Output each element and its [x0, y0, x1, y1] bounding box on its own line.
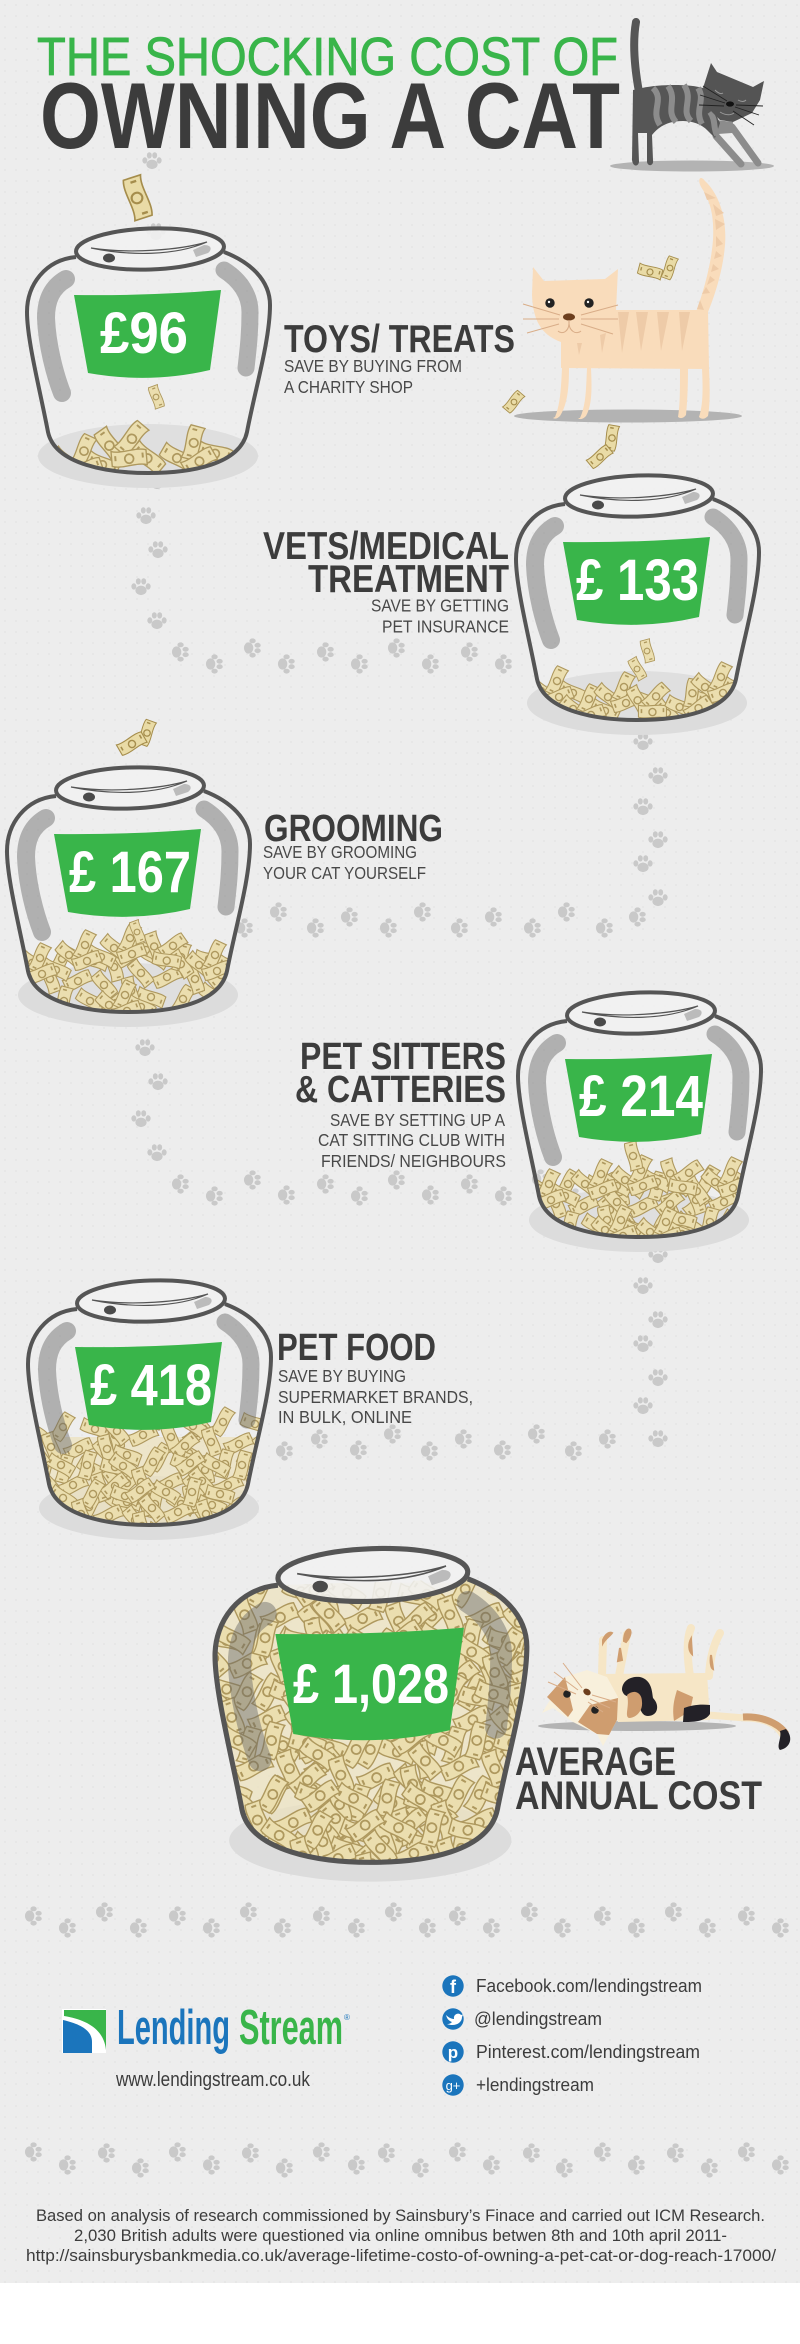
panel: pet food — [10, 1278, 473, 1551]
panel: pet food: £ 418 — [90, 1353, 212, 1418]
heading and tip: PET FOOD — [277, 1327, 436, 1369]
heading and tip: SAVE BY GETTING — [371, 596, 509, 616]
panel: average annual cost — [212, 1546, 790, 1882]
title — [37, 27, 620, 168]
source note: http://sainsburysbankmedia.co.uk/average-lifetime-costo-of-owning-a-pet-cat-or-dog-reach-17000/ — [26, 2246, 776, 2265]
social: pinterest: p — [448, 2043, 458, 2062]
paw trail: from sitters jar to food jar — [276, 1246, 668, 1461]
paw row below footer — [25, 2142, 789, 2178]
heading and tip: PET INSURANCE — [382, 616, 509, 636]
heading and tip: SAVE BY SETTING UP A — [330, 1110, 505, 1130]
heading and tip — [284, 318, 515, 397]
heading and tip — [263, 525, 509, 636]
logo: Lending Stream — [62, 2001, 350, 2055]
source note — [26, 2206, 776, 2265]
source note: Based on analysis of research commissioned by Sainsbury’s Finace and carried out ICM Research. — [36, 2206, 765, 2225]
social: google plus: g+ — [446, 2078, 460, 2093]
social: facebook: f — [450, 1977, 457, 1997]
website: www.lendingstream.co.uk — [115, 2069, 311, 2091]
heading and tip: SUPERMARKET BRANDS, — [278, 1387, 473, 1407]
illustration: calico cat — [538, 1628, 790, 1750]
heading and tip: TREATMENT — [308, 558, 509, 601]
jar with £133 — [516, 473, 759, 735]
heading and tip: TOYS/ TREATS — [284, 318, 515, 361]
heading and tip: YOUR CAT YOURSELF — [263, 863, 426, 883]
panel: pet sitters and catteries — [295, 990, 777, 1252]
jar with £214 — [515, 990, 777, 1252]
panel: pet sitters and catteries: £ 214 — [579, 1064, 703, 1129]
illustration: grey cat — [610, 22, 774, 172]
panel: average annual cost: £ 1,028 — [293, 1652, 449, 1715]
paw trail: upper left — [131, 152, 512, 674]
logo: Lending Stream: ® — [344, 2013, 350, 2022]
heading and tip: & CATTERIES — [295, 1069, 506, 1111]
paw trail: from grooming jar to sitters jar — [131, 1007, 584, 1208]
heading: AVERAGE — [515, 1740, 676, 1784]
panel: toys and treats — [27, 226, 515, 488]
heading and tip — [263, 808, 443, 883]
heading and tip: IN BULK, ONLINE — [278, 1407, 412, 1427]
heading and tip: A CHARITY SHOP — [284, 377, 413, 397]
social: facebook: Facebook.com/lendingstream — [476, 1976, 702, 1996]
heading — [515, 1740, 762, 1818]
logo: Lending Stream: Lending — [117, 2001, 230, 2055]
social: pinterest: Pinterest.com/lendingstream — [476, 2042, 700, 2062]
heading and tip: PET SITTERS — [300, 1036, 506, 1078]
panel: vets and medical treatment — [263, 473, 759, 735]
source note: 2,030 British adults were questioned via online omnibus betwen 8th and 10th april 2011- — [74, 2226, 727, 2245]
logo: Lending Stream: Stream — [239, 2001, 343, 2055]
panel: grooming — [7, 765, 443, 1027]
falling banknotes — [116, 175, 678, 756]
heading and tip: FRIENDS/ NEIGHBOURS — [321, 1151, 506, 1171]
illustration: orange cat — [514, 178, 742, 422]
heading: ANNUAL COST — [515, 1774, 762, 1818]
jar with £1,028 — [212, 1546, 530, 1882]
heading and tip — [277, 1327, 473, 1427]
jar with £96: £96 — [100, 301, 188, 366]
paw row above footer — [25, 1902, 789, 1938]
panel: vets and medical treatment: £ 133 — [576, 548, 699, 613]
heading and tip — [295, 1036, 506, 1171]
title: THE SHOCKING COST OF — [37, 27, 618, 87]
heading and tip: CAT SITTING CLUB WITH — [318, 1130, 505, 1150]
heading and tip: GROOMING — [264, 808, 443, 850]
heading and tip: VETS/MEDICAL — [263, 525, 509, 568]
heading and tip: SAVE BY BUYING — [278, 1366, 406, 1386]
heading and tip: SAVE BY GROOMING — [263, 842, 417, 862]
social: google plus: +lendingstream — [476, 2075, 594, 2095]
panel: grooming: £ 167 — [69, 840, 191, 905]
heading and tip: SAVE BY BUYING FROM — [284, 356, 462, 376]
title: OWNING A CAT — [40, 63, 620, 168]
social: twitter: @lendingstream — [474, 2009, 602, 2029]
paw trail: from vets jar to grooming jar — [236, 705, 671, 938]
jar with £167 — [7, 765, 250, 1027]
jar with £96 — [27, 226, 270, 488]
jar with £418 — [26, 1278, 273, 1540]
